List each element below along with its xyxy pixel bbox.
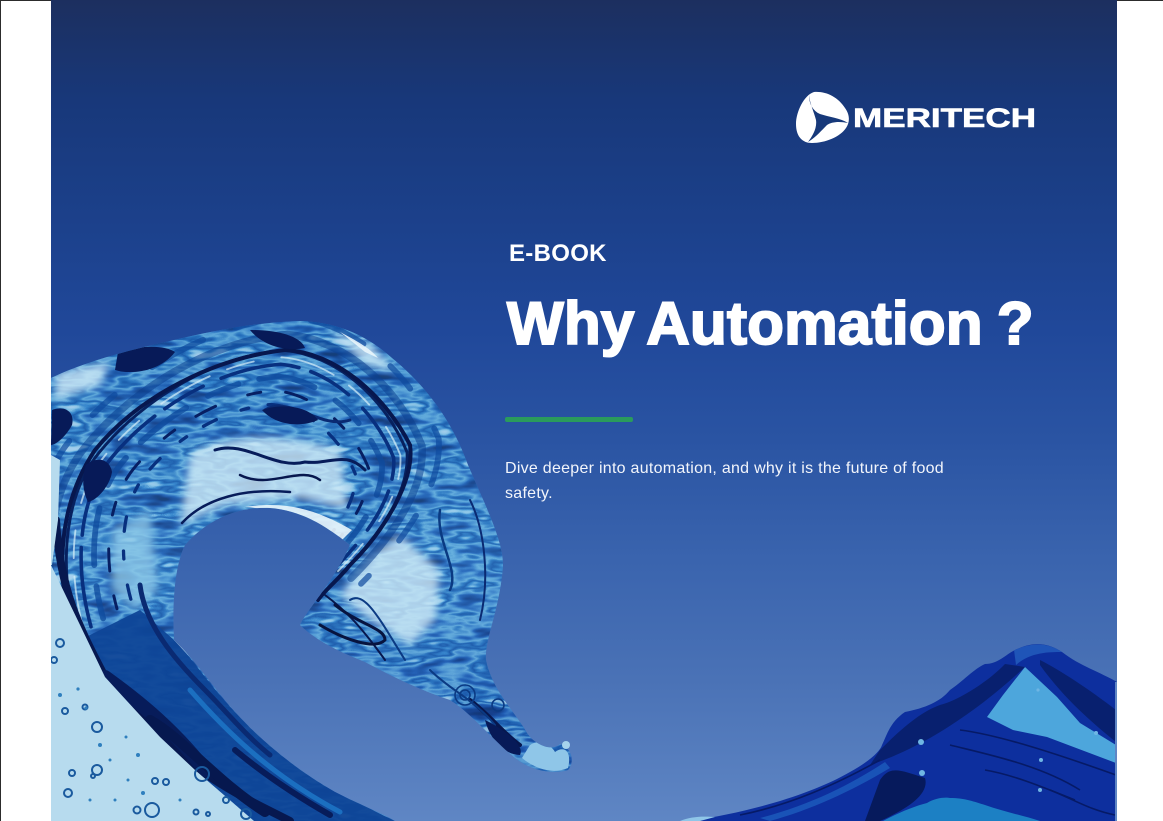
pale highlight areas — [55, 330, 440, 645]
small air bubbles — [918, 688, 1098, 792]
e-book label: E-BOOK — [509, 240, 607, 267]
water shimmer — [760, 762, 890, 821]
main water wave — [31, 310, 580, 821]
title: Why Automation ? — [507, 290, 1034, 357]
foam highlights on the inner edge — [174, 332, 378, 672]
subtitle text — [505, 460, 944, 502]
pale strip at the panel edge — [1115, 682, 1117, 821]
light wave edge at the bottom — [680, 817, 715, 821]
green divider bar — [505, 417, 633, 422]
right water wave — [680, 630, 1120, 821]
pale strip on the left edge — [51, 455, 60, 565]
logo: Meritech — [796, 92, 1036, 143]
deep blue ribbons — [56, 350, 520, 821]
droplet — [562, 741, 570, 749]
lower-left pale water — [51, 565, 254, 821]
subtitle text: safety. — [505, 485, 553, 502]
pale blue pool — [987, 667, 1116, 763]
water ripple texture — [40, 310, 580, 821]
dark crest shadows — [865, 660, 1116, 821]
crest edge highlight — [1014, 644, 1062, 665]
subtitle text: Dive deeper into automation, and why it is the future of food — [505, 460, 944, 477]
logo mark — [796, 92, 849, 143]
dark blobs — [51, 330, 521, 755]
streaks — [740, 730, 1116, 815]
lower pool — [883, 798, 1040, 821]
logo wordmark: MERITECH — [853, 103, 1036, 133]
wave body — [31, 310, 580, 821]
concentric flow lines — [52, 322, 442, 629]
droplet circle details — [455, 685, 504, 711]
bubbles — [51, 639, 251, 819]
droplet tip — [522, 742, 569, 771]
darker lower band — [80, 610, 395, 821]
